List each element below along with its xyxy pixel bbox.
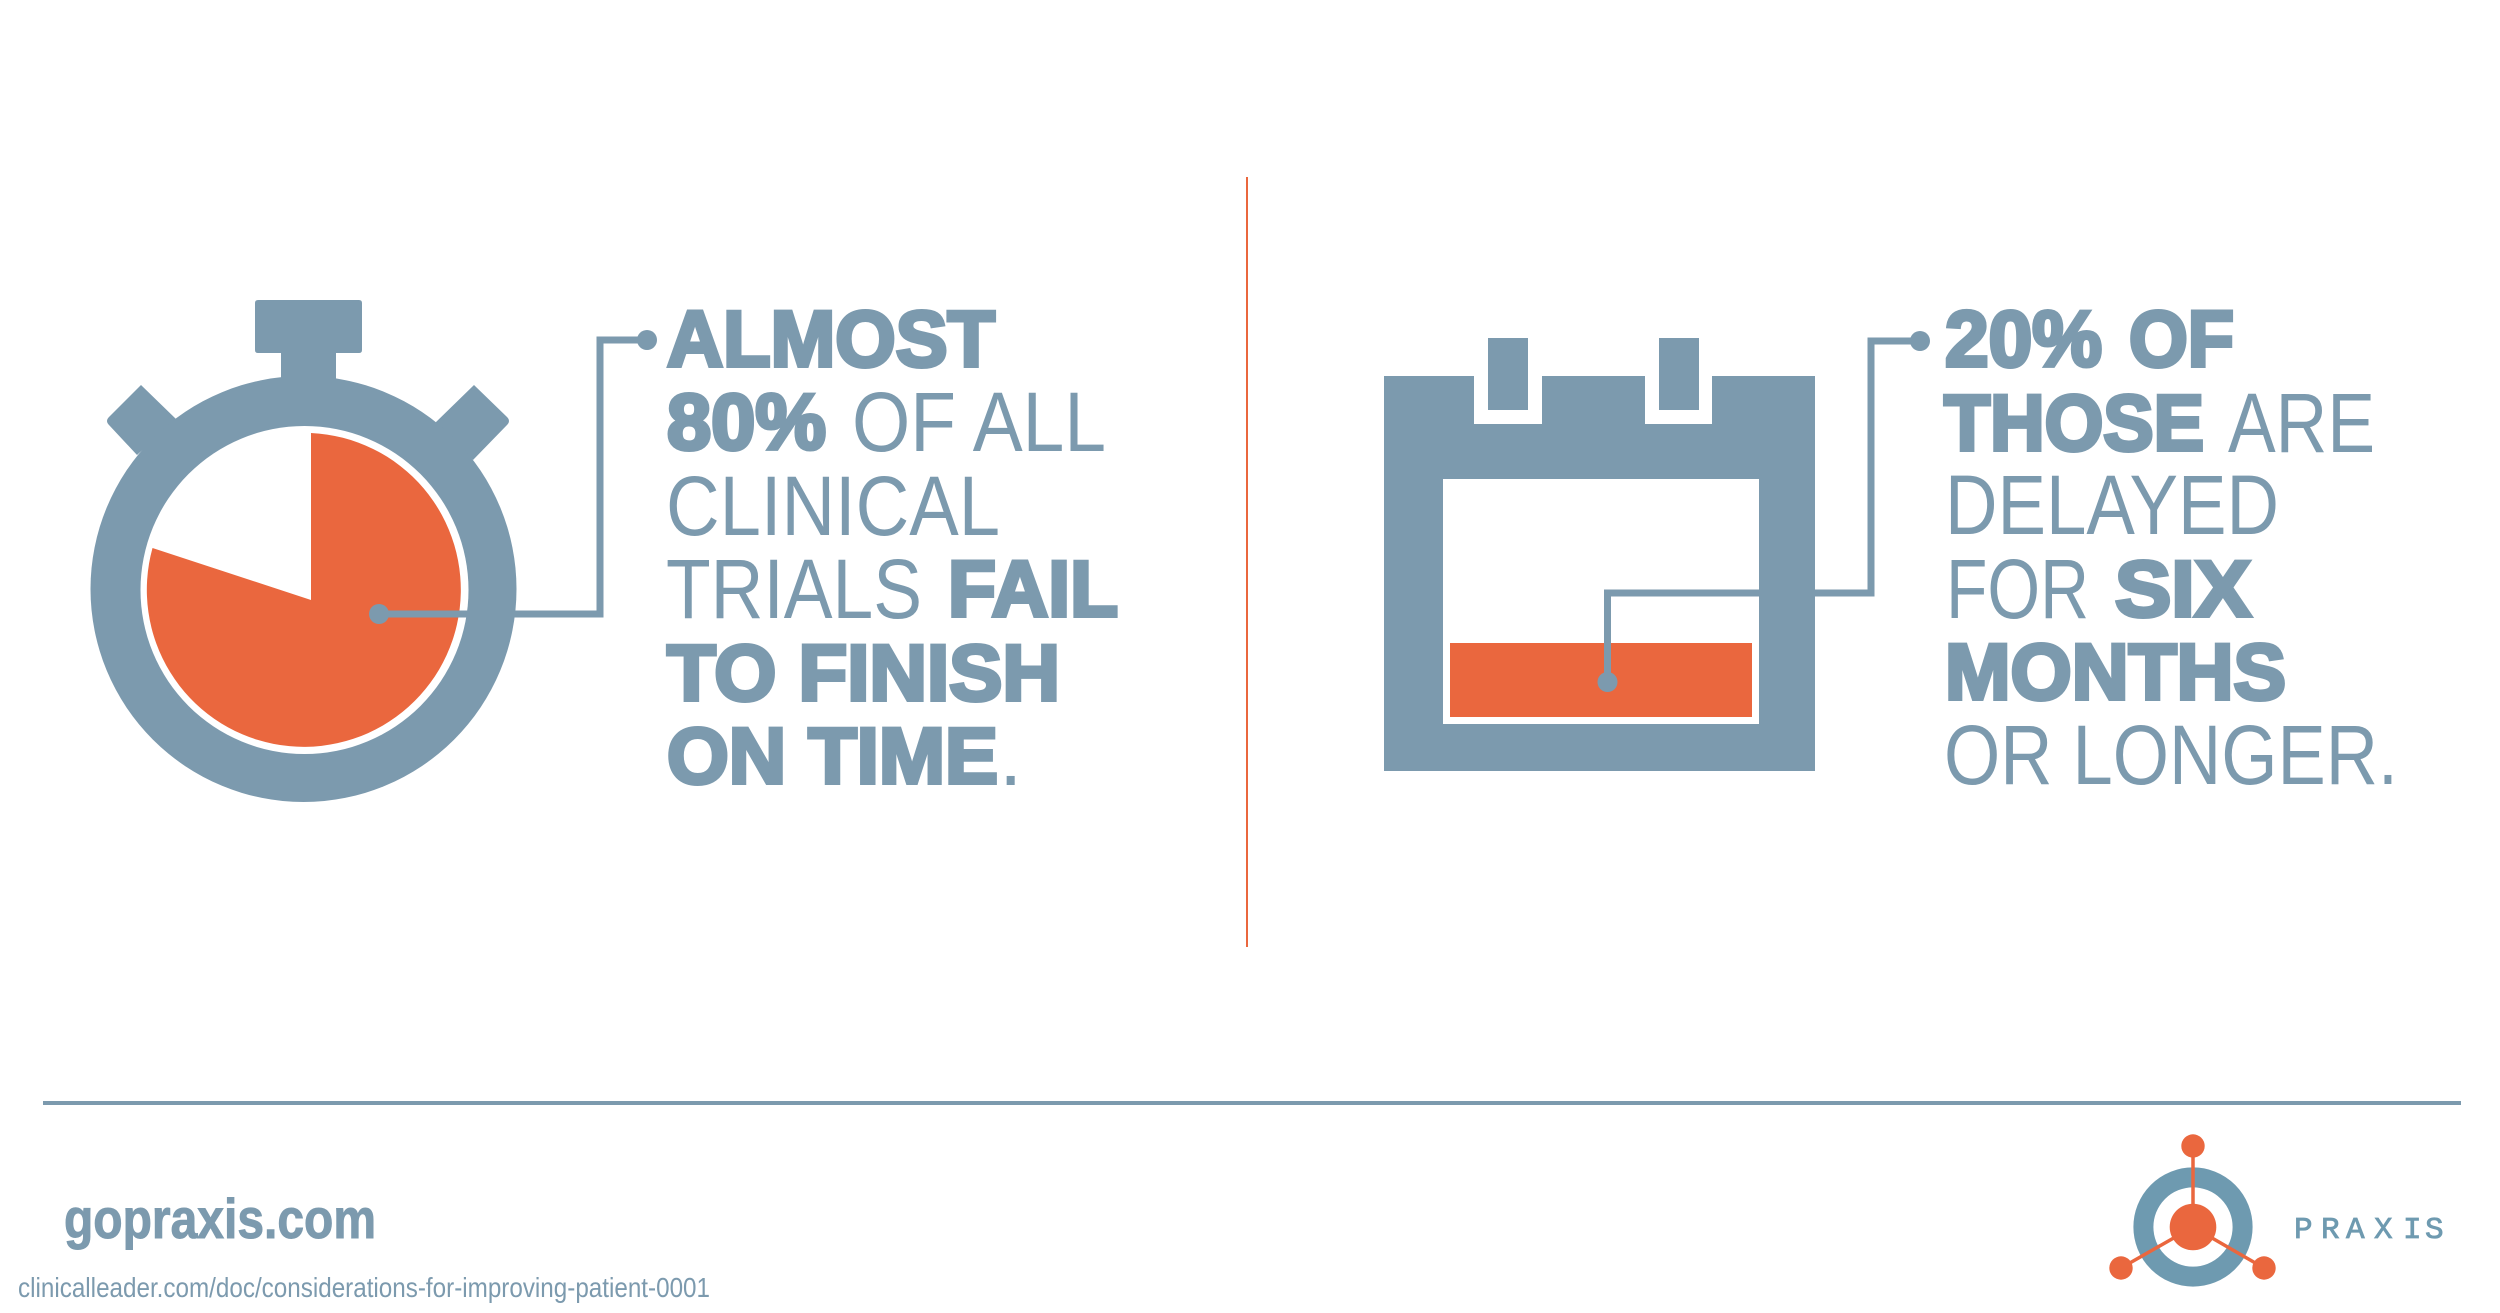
website name: gopraxis.com (64, 1187, 376, 1250)
footer rule (43, 1101, 2461, 1105)
text: almost 80 percent fail to finish on time: . (999, 709, 1022, 803)
calendar body (1384, 376, 1815, 771)
text: 20 percent delayed six months or longer: FOR (1946, 542, 2089, 636)
text: 20 percent delayed six months or longer: SIX (2115, 544, 2251, 633)
text: 20 percent delayed six months or longer: ARE (2228, 376, 2375, 470)
icon: stopwatch (90, 300, 516, 802)
logo ring (2143, 1177, 2243, 1277)
logo center dot (2170, 1204, 2216, 1250)
20 percent orange bar (1450, 643, 1752, 717)
logo left dot (2109, 1256, 2133, 1280)
panel: calendar statistic (1384, 294, 2398, 802)
stopwatch side lugs (107, 385, 509, 460)
text: almost 80 percent fail to finish on time: ALMOST (667, 294, 995, 383)
panel: stopwatch statistic (90, 294, 1118, 803)
calendar page (1443, 479, 1759, 724)
stopwatch crown (255, 300, 362, 383)
logo wordmark: PRAXIS (2294, 1213, 2444, 1248)
stopwatch ring (90, 376, 516, 802)
stopwatch face (140, 426, 468, 754)
text: 20 percent delayed six months or longer: OR LONGER. (1944, 708, 2398, 802)
text: almost 80 percent fail to finish on time: TO FINISH (667, 628, 1060, 717)
source url: clinicalleader.com/doc/considerations-for-improving-patient-0001 (18, 1272, 710, 1303)
text: almost 80 percent fail to finish on time: OF ALL (852, 375, 1106, 469)
80 percent pie wedge (147, 433, 461, 747)
logo: praxis (2109, 1134, 2444, 1280)
text: almost 80 percent fail to finish on time (666, 294, 1118, 803)
logo right dot (2252, 1256, 2276, 1280)
text: 20 percent delayed six months or longer: OF (2129, 294, 2234, 383)
logo spokes (2121, 1146, 2264, 1268)
calendar right peg (1659, 338, 1699, 410)
text: 20 percent delayed six months or longer: THOSE (1944, 378, 2204, 467)
text: almost 80 percent fail to finish on time: TRIALS (666, 542, 922, 636)
text: almost 80 percent fail to finish on time: FAIL (948, 544, 1118, 633)
connector from calendar to text (1598, 331, 1930, 692)
icon: calendar (1384, 338, 1815, 771)
text: 20 percent delayed six months or longer (1944, 294, 2398, 802)
text: 20 percent delayed six months or longer: DELAYED (1945, 458, 2279, 552)
text: almost 80 percent fail to finish on time: 80% (667, 377, 826, 466)
connector from stopwatch to text (369, 330, 657, 624)
calendar left peg (1488, 338, 1528, 410)
text: almost 80 percent fail to finish on time: ON TIME (667, 711, 998, 800)
text: almost 80 percent fail to finish on time: CLINICAL (666, 459, 1000, 553)
divider between panels (1246, 177, 1248, 947)
text: 20 percent delayed six months or longer: 20% (1945, 294, 2102, 383)
logo top dot (2181, 1134, 2205, 1158)
text: 20 percent delayed six months or longer: MONTHS (1945, 627, 2286, 716)
